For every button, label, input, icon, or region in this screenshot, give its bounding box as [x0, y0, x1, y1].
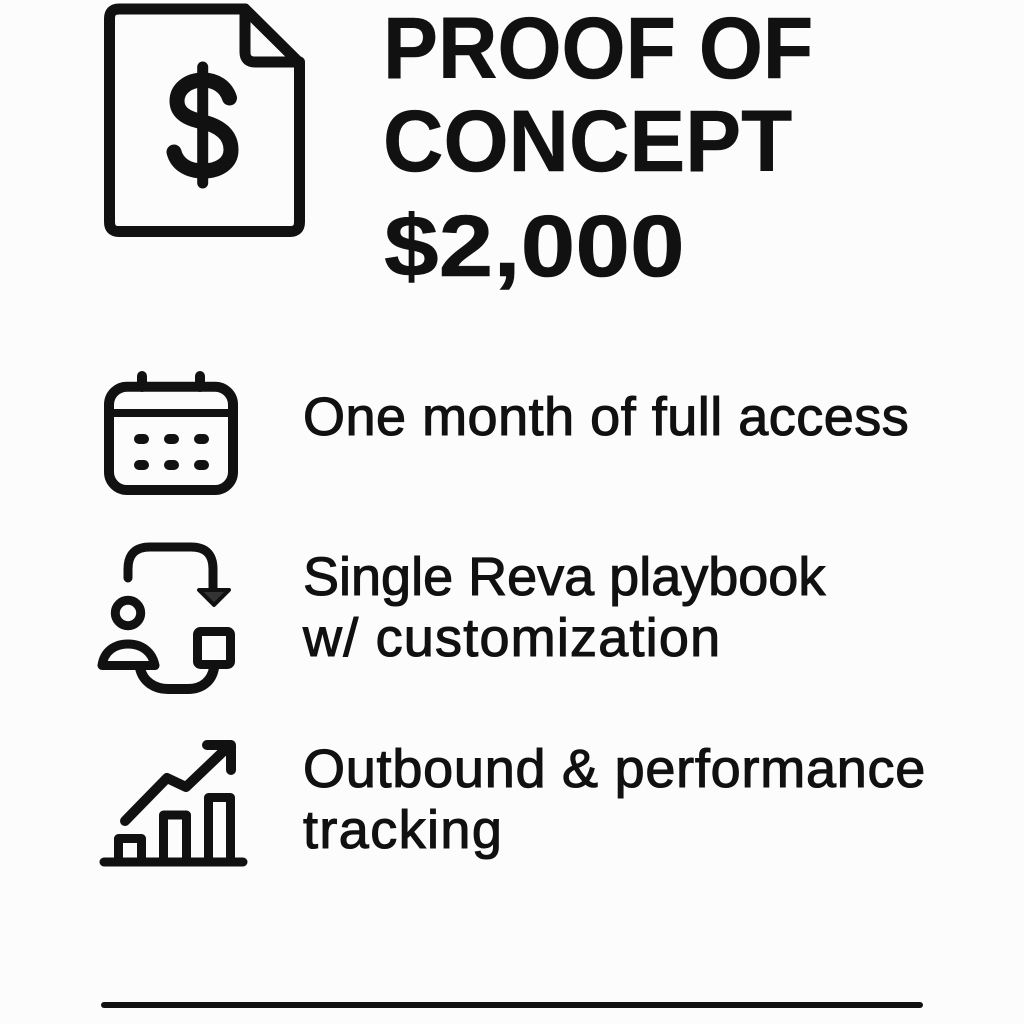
title second line: CONCEPT: [383, 93, 792, 190]
text: single reva playbook: w/ customization: [303, 608, 721, 668]
text: single reva playbook: Single Reva playbook: [303, 547, 825, 607]
text: single reva playbook: [302, 547, 826, 668]
icon: calendar: [104, 371, 238, 495]
text: outbound and performance tracking: [303, 739, 926, 860]
title: PROOF OF: [383, 0, 813, 97]
text: one month of full access: One month of full access: [303, 387, 909, 447]
price: $2,000: [384, 198, 685, 295]
text: outbound and performance tracking: Outbound & performance: [303, 739, 926, 799]
icon: rising bar chart with arrow: [100, 740, 248, 866]
text: outbound and performance tracking: tracking: [303, 800, 503, 860]
icon: person and device workflow loop: [98, 542, 235, 694]
bottom rule: [101, 1002, 923, 1008]
icon: invoice document with dollar sign: [104, 4, 305, 237]
